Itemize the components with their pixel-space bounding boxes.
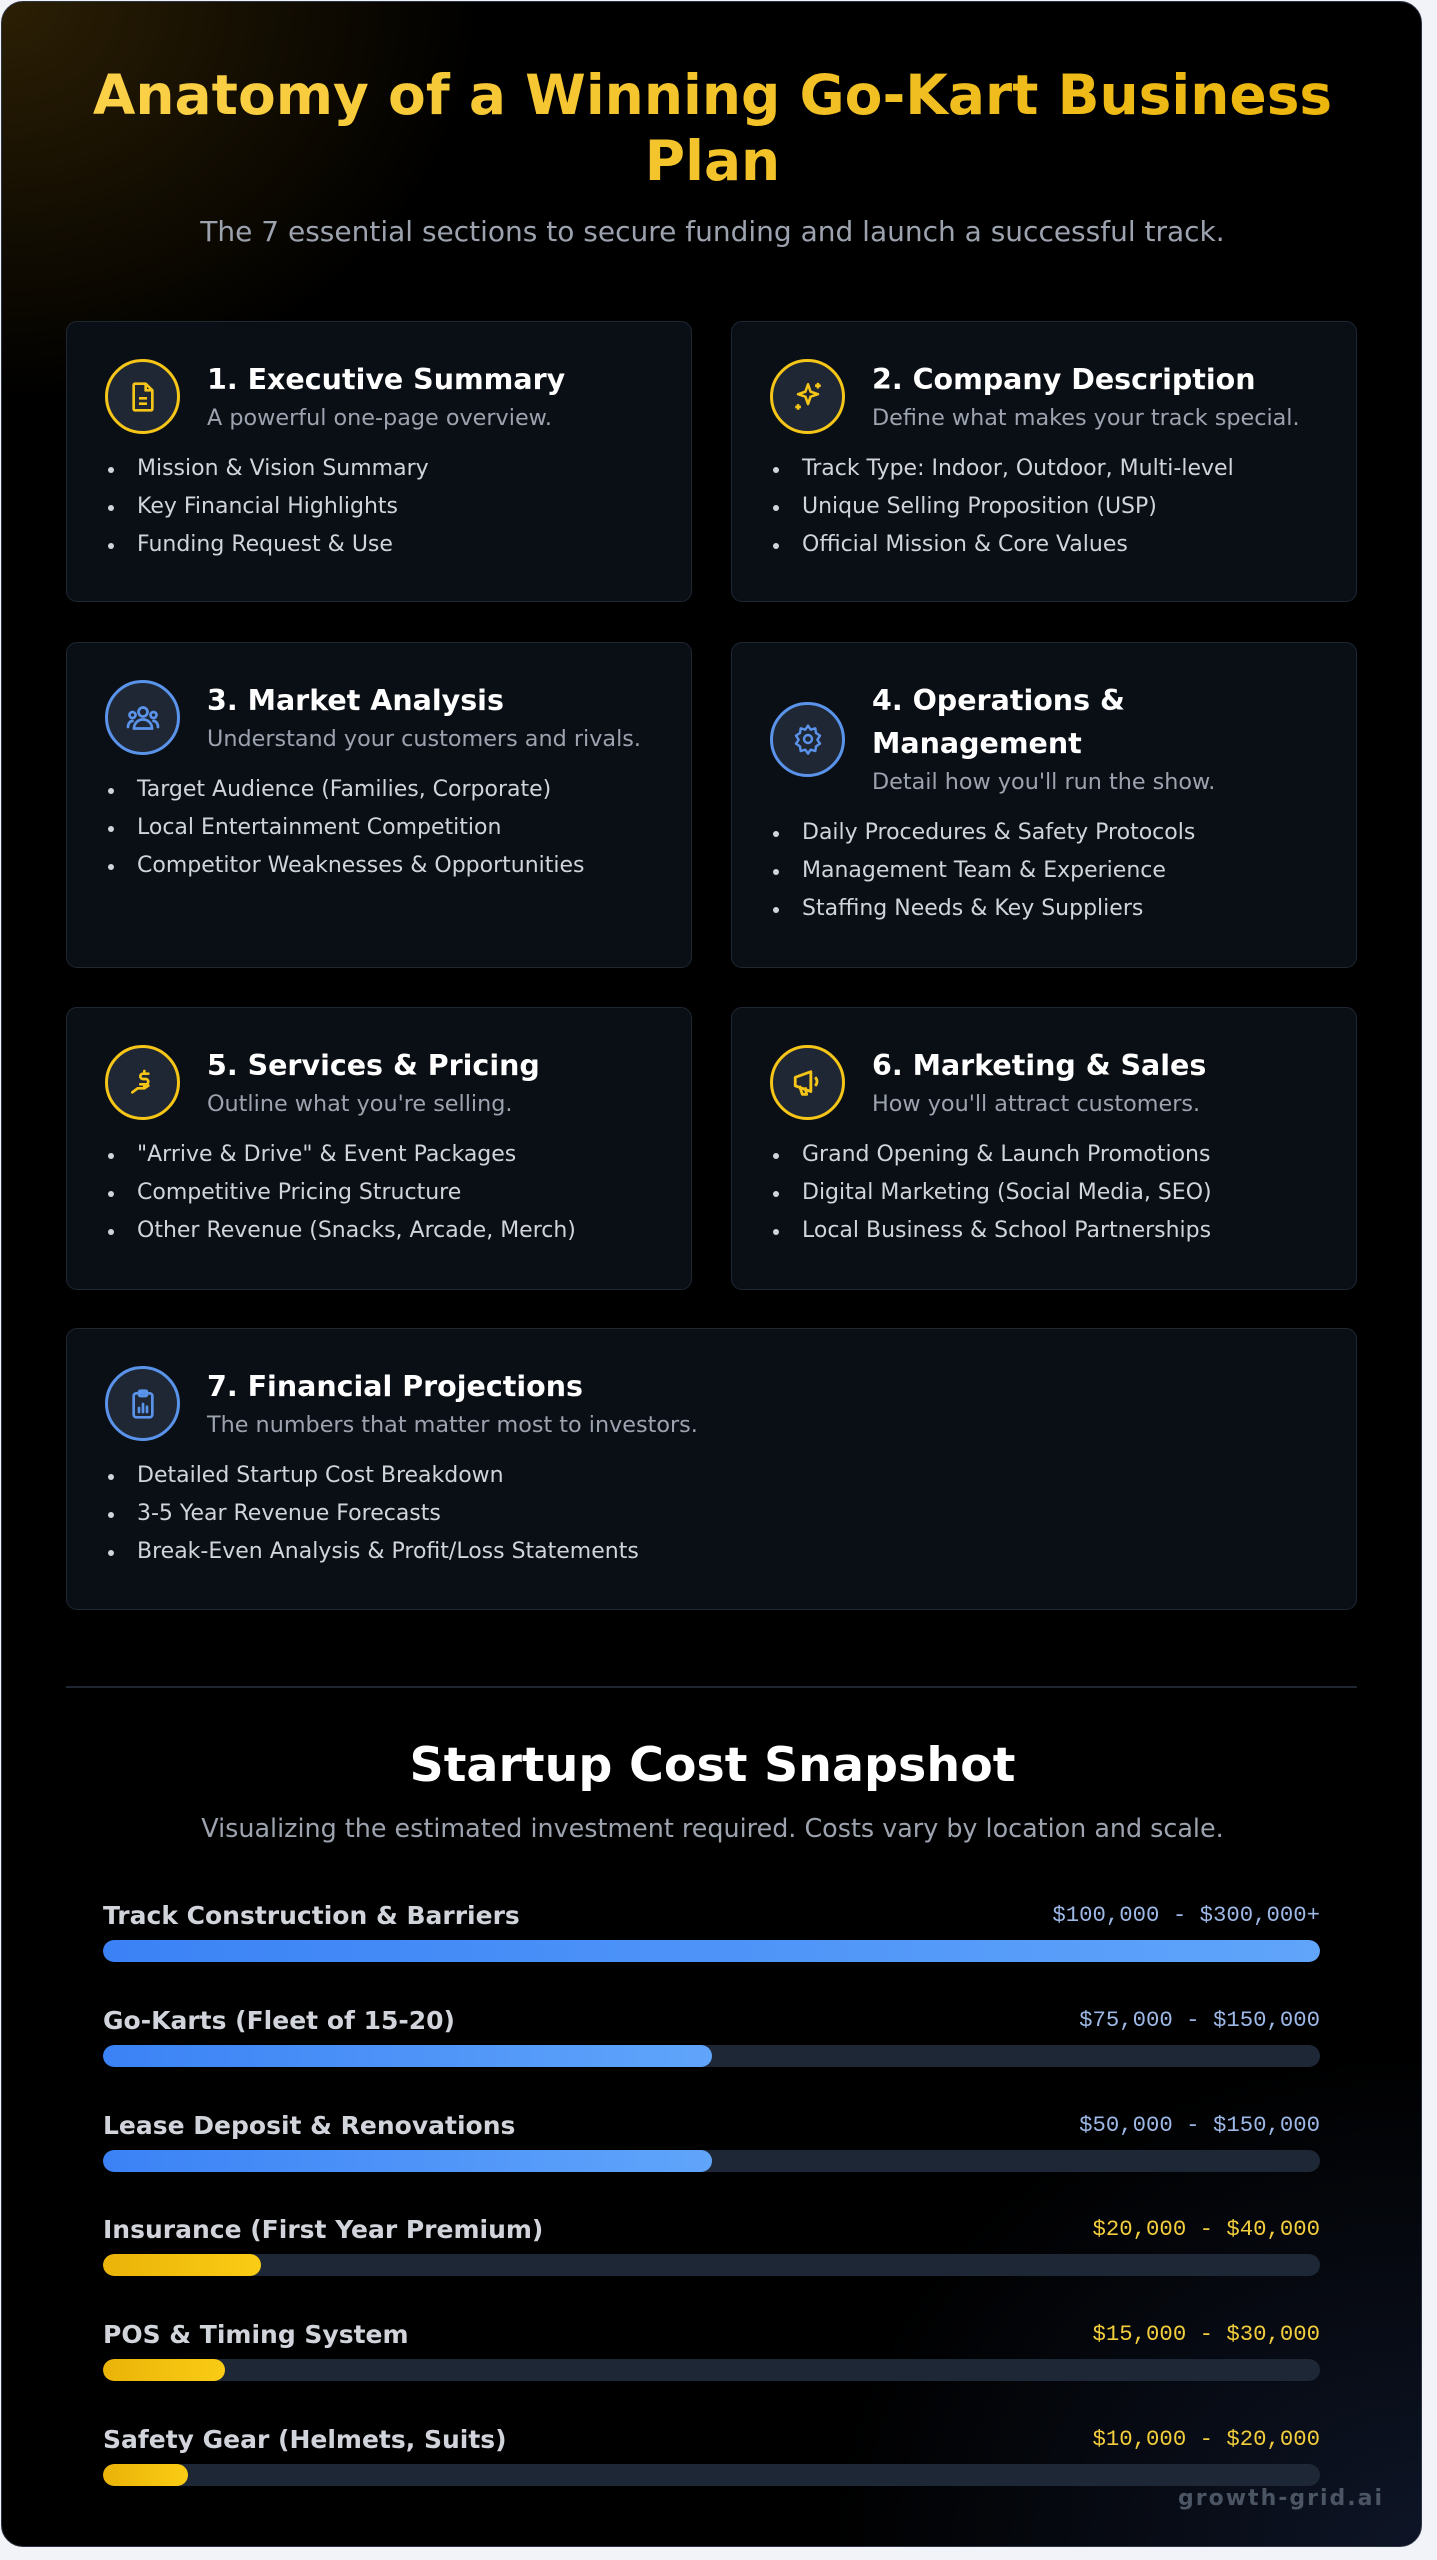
icon: hand coins — [105, 1045, 180, 1120]
bar: safety gear — [103, 2424, 1320, 2486]
bar: POS & timing: $15,000 - $30,000 — [1093, 2321, 1320, 2347]
panel: operations & management: 4. Operations & — [872, 684, 1125, 717]
bar: go-karts — [103, 2006, 1320, 2067]
panel: executive summary: Key Financial Highlights — [137, 494, 398, 519]
icon: megaphone — [770, 1045, 845, 1120]
panel: services & pricing: Other Revenue (Snacks, Arcade, Merch) — [137, 1218, 576, 1243]
panel: financial projections — [66, 1328, 1357, 1610]
panel: financial projections: Break-Even Analysis & Profit/Loss Statements — [137, 1539, 639, 1564]
heading: startup cost snapshot: Startup Cost Snapshot — [410, 1738, 1015, 1793]
watermark: growth-grid.ai — [1178, 2486, 1384, 2511]
bar: safety gear: Safety Gear (Helmets, Suits) — [103, 2424, 507, 2454]
panel: marketing & sales: How you'll attract customers. — [872, 1091, 1200, 1117]
panel: financial projections: Detailed Startup Cost Breakdown — [137, 1463, 504, 1488]
panel: executive summary — [66, 321, 692, 602]
bar: track construction: $100,000 - $300,000+ — [1052, 1902, 1320, 1928]
panel: market analysis: Understand your customers and rivals. — [207, 726, 641, 752]
panel: company description: Official Mission & Core Values — [802, 532, 1128, 557]
icon: users — [105, 680, 180, 755]
panel: company description — [731, 321, 1357, 602]
bar: lease deposit: Lease Deposit & Renovations — [103, 2110, 515, 2140]
bar: insurance — [103, 2214, 1320, 2276]
panel: executive summary: 1. Executive Summary — [207, 363, 565, 396]
panel: market analysis: Local Entertainment Competition — [137, 815, 501, 840]
panel: operations & management: Staffing Needs & Key Suppliers — [802, 896, 1143, 921]
icon: gear — [770, 702, 845, 776]
bar: track construction — [103, 1900, 1320, 1962]
panel: executive summary: A powerful one-page overview. — [207, 405, 552, 431]
bar: go-karts: $75,000 - $150,000 — [1079, 2007, 1320, 2033]
bar: POS & timing: POS & Timing System — [103, 2320, 409, 2348]
panel: market analysis — [66, 642, 692, 968]
panel: company description: Unique Selling Proposition (USP) — [802, 494, 1157, 519]
bar: safety gear: $10,000 - $20,000 — [1093, 2426, 1320, 2452]
panel: market analysis: Competitor Weaknesses & Opportunities — [137, 853, 584, 878]
panel: market analysis: 3. Market Analysis — [207, 684, 504, 717]
icon: document — [105, 359, 180, 434]
panel: financial projections: 3-5 Year Revenue Forecasts — [137, 1501, 441, 1526]
bar: track construction: Track Construction & Barriers — [103, 1900, 520, 1930]
panel: operations & management: Detail how you'll run the show. — [872, 769, 1215, 795]
title — [2, 62, 1423, 194]
panel: marketing & sales — [731, 1007, 1357, 1290]
panel: company description: Track Type: Indoor, Outdoor, Multi-level — [802, 456, 1234, 481]
subtitle: The 7 essential sections to secure funding and launch a successful track. — [200, 215, 1225, 248]
panel: company description: 2. Company Description — [872, 363, 1256, 396]
panel: operations & management — [731, 642, 1357, 968]
panel: marketing & sales: Digital Marketing (Social Media, SEO) — [802, 1180, 1212, 1205]
icon: clipboard chart — [105, 1366, 180, 1441]
panel: services & pricing: 5. Services & Pricing — [207, 1049, 540, 1082]
panel: services & pricing: "Arrive & Drive" & Event Packages — [137, 1142, 516, 1167]
bar: insurance: Insurance (First Year Premium) — [103, 2214, 543, 2244]
title: Plan — [645, 129, 780, 193]
panel: marketing & sales: 6. Marketing & Sales — [872, 1049, 1206, 1082]
subtitle: cost note: Visualizing the estimated investment required. Costs vary by location and scale. — [201, 1813, 1224, 1843]
panel: operations & management: Daily Procedures & Safety Protocols — [802, 820, 1195, 845]
panel: services & pricing — [66, 1007, 692, 1290]
panel: market analysis: Target Audience (Families, Corporate) — [137, 777, 551, 802]
panel: company description: Define what makes your track special. — [872, 405, 1300, 431]
panel: marketing & sales: Grand Opening & Launch Promotions — [802, 1142, 1210, 1167]
bar: lease deposit: $50,000 - $150,000 — [1079, 2112, 1320, 2138]
bar: insurance: $20,000 - $40,000 — [1093, 2216, 1320, 2242]
panel: executive summary: Funding Request & Use — [137, 532, 393, 557]
panel: services & pricing: Outline what you're selling. — [207, 1091, 512, 1117]
panel: operations & management: Management Team & Experience — [802, 858, 1166, 883]
icon: sparkles — [770, 359, 845, 434]
bar: go-karts: Go-Karts (Fleet of 15-20) — [103, 2006, 455, 2034]
panel: executive summary: Mission & Vision Summary — [137, 456, 429, 481]
panel: services & pricing: Competitive Pricing Structure — [137, 1180, 461, 1205]
panel: marketing & sales: Local Business & School Partnerships — [802, 1218, 1211, 1243]
bar: POS & timing — [103, 2320, 1320, 2381]
panel: financial projections: The numbers that matter most to investors. — [207, 1412, 698, 1438]
panel: financial projections: 7. Financial Projections — [207, 1370, 583, 1403]
bar: lease deposit — [103, 2110, 1320, 2172]
panel: operations & management: Management — [872, 727, 1082, 760]
title: Anatomy of a Winning Go-Kart Business — [93, 63, 1332, 127]
